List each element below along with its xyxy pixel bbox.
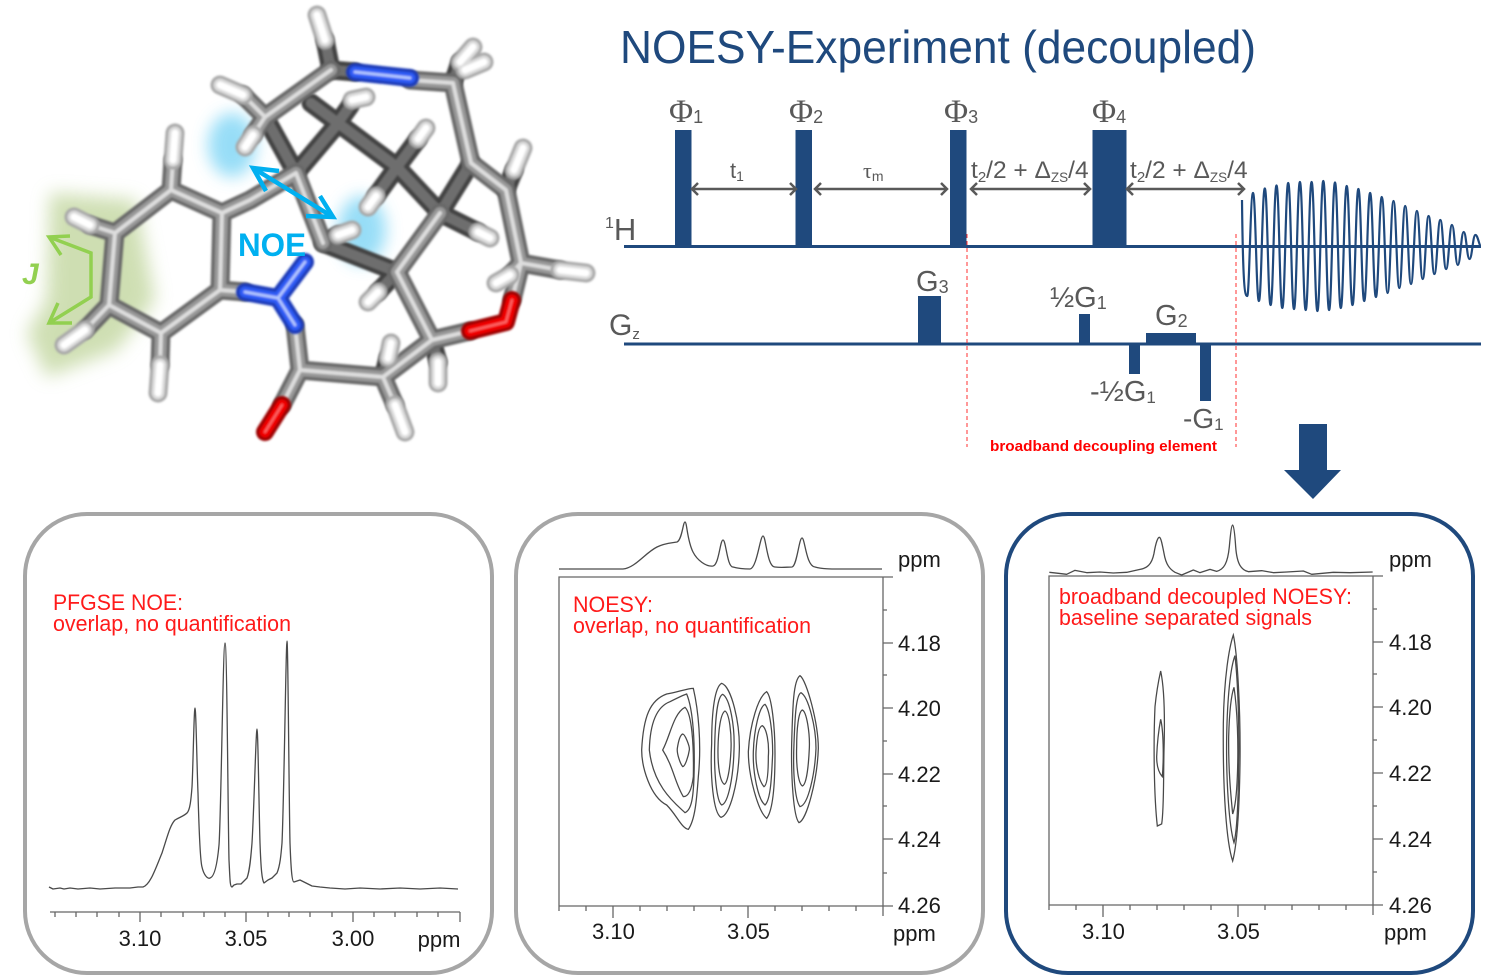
- gradient labels: ½G: [1050, 282, 1097, 314]
- NOE double arrow: [253, 168, 333, 217]
- channel labels: 1: [605, 215, 614, 232]
- panel frame: [25, 514, 492, 973]
- broadband decoupling caption: broadband decoupling element: [990, 438, 1217, 455]
- x axis: [50, 912, 460, 922]
- axis labels: ppm: [1384, 920, 1427, 945]
- gradient pulses: [918, 296, 1211, 401]
- blue NOE highlights: [208, 113, 386, 264]
- NOE label: NOE: [238, 227, 306, 263]
- phase labels: 3: [968, 107, 978, 127]
- delay labels: [730, 157, 1248, 186]
- axis labels: ppm: [1389, 547, 1432, 572]
- 1D spectrum: [49, 641, 458, 889]
- axis labels: ppm: [898, 547, 941, 572]
- axis labels: 4.20: [898, 696, 941, 721]
- gradient labels: 1: [1097, 293, 1107, 313]
- phase labels: Φ: [789, 94, 813, 130]
- J coupling arrows: [49, 236, 91, 323]
- gradient labels: G: [916, 266, 939, 298]
- delay labels: 2: [1137, 169, 1145, 186]
- phase labels: [669, 94, 1126, 130]
- channel labels: z: [632, 326, 640, 343]
- nitrogen bonds: [245, 72, 410, 325]
- plot frame and ticks: [559, 577, 893, 918]
- axis labels: 3.10: [1082, 919, 1125, 944]
- axis labels: 4.24: [1389, 827, 1432, 852]
- annotation: [573, 592, 811, 638]
- phase labels: 2: [813, 107, 823, 127]
- axis labels: 3.05: [1217, 919, 1260, 944]
- axis labels: 4.18: [1389, 630, 1432, 655]
- channel lines: [624, 246, 1481, 344]
- panel frame: [516, 514, 983, 973]
- phase labels: 1: [693, 107, 703, 127]
- axis labels: 4.20: [1389, 695, 1432, 720]
- delay labels: /2 + Δ: [986, 157, 1051, 184]
- annotation: broadband decoupled NOESY:: [1059, 584, 1352, 609]
- axis labels: 3.10: [592, 919, 635, 944]
- delay labels: 2: [978, 169, 986, 186]
- gradient labels: [916, 266, 1224, 434]
- phase labels: Φ: [944, 94, 968, 130]
- light skeleton bonds: [85, 70, 560, 405]
- x labels: 3.10: [119, 926, 161, 951]
- gradient labels: 2: [1178, 311, 1188, 331]
- dark back bonds: [265, 40, 514, 377]
- axis labels: ppm: [893, 921, 936, 946]
- hydrogen tips: [64, 15, 586, 432]
- gradient labels: 1: [1214, 415, 1224, 434]
- x labels: 3.00: [332, 926, 374, 951]
- axis labels: [1082, 547, 1432, 945]
- contour plot: [1154, 635, 1240, 861]
- delay labels: /4: [1227, 157, 1248, 184]
- delay labels: ZS: [1210, 170, 1227, 185]
- delay arrows: [692, 183, 1244, 195]
- contour plot: [642, 676, 818, 829]
- title: NOESY-Experiment (decoupled): [620, 21, 1256, 73]
- panel: broadband decoupled NOESY: [1006, 514, 1473, 973]
- axis labels: 4.26: [898, 893, 941, 918]
- x labels: ppm: [418, 927, 460, 952]
- phase labels: 4: [1116, 107, 1126, 127]
- gradient labels: 3: [939, 277, 949, 297]
- annotation: baseline separated signals: [1059, 605, 1312, 630]
- annotation: NOESY:: [573, 592, 653, 617]
- 1H pulses: [675, 130, 1126, 247]
- arrow down to decoupled spectrum: [1284, 424, 1341, 499]
- axis labels: 4.22: [1389, 761, 1432, 786]
- delay labels: /4: [1068, 157, 1089, 184]
- channel labels: [605, 212, 640, 343]
- annotation: overlap, no quantification: [573, 613, 811, 638]
- delay labels: 1: [736, 168, 744, 184]
- J label: J: [22, 258, 40, 291]
- phase labels: Φ: [1092, 94, 1116, 130]
- annotation: PFGSE NOE:: [53, 590, 183, 615]
- panel frame: [1006, 514, 1473, 973]
- x labels: 3.05: [225, 926, 267, 951]
- 1D projection: [1049, 525, 1373, 575]
- delay labels: t: [1130, 157, 1137, 184]
- broadband decoupling element bounds: [967, 234, 1236, 447]
- delay labels: t: [971, 157, 978, 184]
- axis labels: 4.24: [898, 827, 941, 852]
- annotation: [53, 590, 291, 636]
- annotation: [1059, 584, 1352, 630]
- axis labels: 4.18: [898, 631, 941, 656]
- axis labels: 4.26: [1389, 893, 1432, 918]
- panel: PFGSE NOE: [25, 514, 492, 973]
- axis labels: 3.05: [727, 919, 770, 944]
- molecule: 3D stick model with NOE and J annotations: [22, 15, 586, 432]
- channel labels: H: [614, 212, 636, 247]
- oxygen bonds: [265, 300, 512, 432]
- phase labels: Φ: [669, 94, 693, 130]
- channel labels: G: [609, 309, 632, 342]
- gradient labels: -G: [1183, 403, 1214, 434]
- delay labels: ZS: [1051, 170, 1068, 185]
- 1D projection: [559, 522, 882, 569]
- panel: NOESY: [516, 514, 983, 973]
- x labels: [119, 926, 460, 952]
- green J-coupling highlight: [27, 193, 155, 377]
- gradient labels: 1: [1146, 388, 1156, 407]
- axis labels: 4.22: [898, 762, 941, 787]
- pulse sequence diagram: [605, 94, 1481, 455]
- delay labels: m: [872, 168, 884, 184]
- delay labels: τ: [863, 158, 872, 183]
- delay labels: t: [730, 158, 736, 183]
- plot frame and ticks: [1049, 576, 1383, 917]
- FID signal: [1242, 181, 1481, 311]
- delay labels: /2 + Δ: [1145, 157, 1210, 184]
- axis labels: [592, 547, 941, 946]
- gradient labels: G: [1155, 300, 1178, 332]
- annotation: overlap, no quantification: [53, 611, 291, 636]
- gradient labels: -½G: [1090, 376, 1146, 408]
